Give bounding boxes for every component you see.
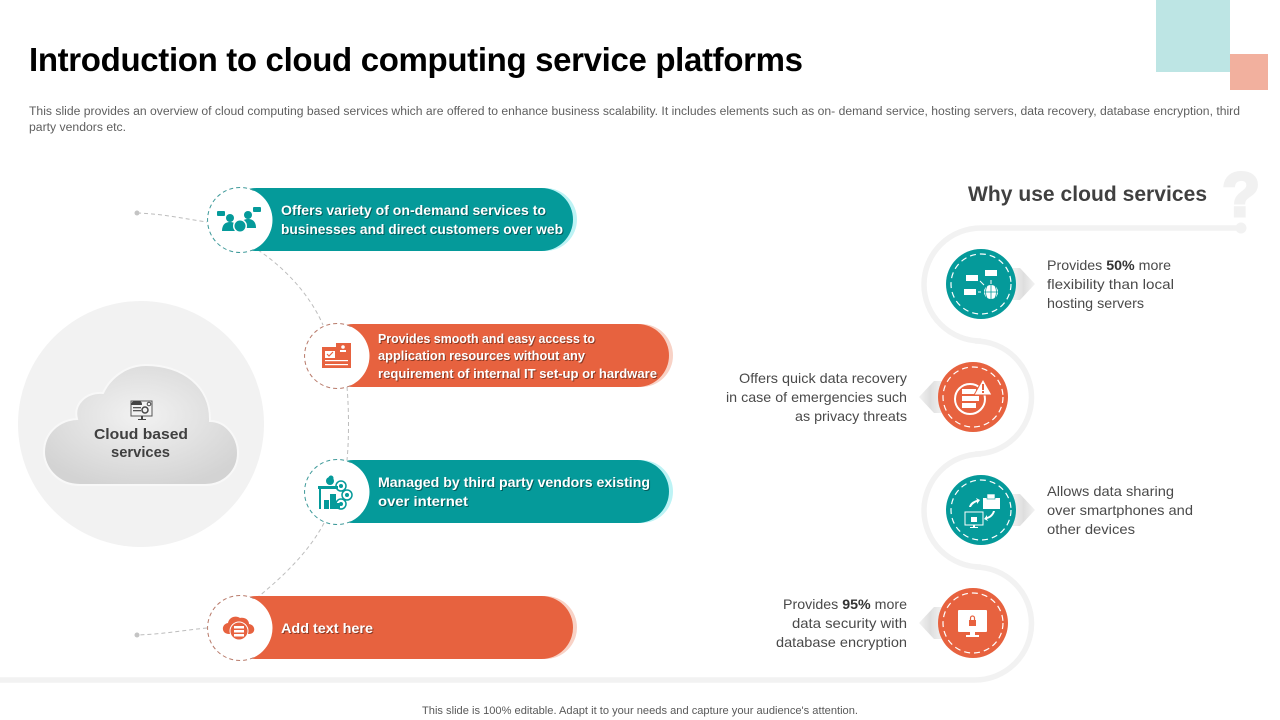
connector end dot: bottom <box>134 632 140 638</box>
dashed connector curve <box>137 213 348 635</box>
item 2 text: Offers quick data recovery <box>739 370 907 386</box>
pill 3 text: over internet <box>378 493 468 509</box>
icon: cloud with server <box>223 617 254 640</box>
pill 1: on-demand services <box>208 187 577 253</box>
icon: server with warning <box>955 379 992 414</box>
description text <box>29 106 1240 134</box>
description text: party vendors etc. <box>29 122 126 134</box>
footer note: This slide is 100% editable. Adapt it to your needs and capture your audience's attention. <box>422 705 858 717</box>
pill 2 text: application resources without any <box>378 348 586 363</box>
item 2 text: in case of emergencies such <box>726 389 907 405</box>
item 2 text: as privacy threats <box>795 408 907 424</box>
pill 3 text <box>378 474 650 509</box>
icon: monitor with lock <box>958 610 987 637</box>
title: Introduction to cloud computing service platforms <box>29 41 803 78</box>
decorative corner square: salmon <box>1230 54 1268 90</box>
pill 2 text: Provides smooth and easy access to <box>378 331 595 346</box>
cloud shape <box>44 365 238 485</box>
pill 1 text: businesses and direct customers over web <box>281 221 563 237</box>
cloud label: services <box>111 444 170 461</box>
pill 3: third party vendors <box>304 460 673 524</box>
snake end dot <box>1236 222 1246 234</box>
item 3 text <box>1047 483 1193 537</box>
icon: servers and globe <box>964 270 998 299</box>
pill 3 text: Managed by third party vendors existing <box>378 474 650 490</box>
item 3 text: Allows data sharing <box>1047 483 1174 499</box>
pill 2 text <box>378 331 657 381</box>
panel: cloud based services hub <box>18 301 264 547</box>
item 3: data sharing <box>946 475 1193 545</box>
icon: building with vendors <box>318 476 352 509</box>
item 2 text <box>726 370 907 424</box>
item 4 text: data security with <box>792 615 907 631</box>
pill 1 text: Offers variety of on-demand services to <box>281 202 546 218</box>
item 4: data security <box>776 588 1008 658</box>
pill 2 text: requirement of internal IT set-up or hardware <box>378 366 657 381</box>
icon: application form <box>322 343 351 368</box>
decorative corner square: teal <box>1156 0 1230 72</box>
item 1 text: flexibility than local <box>1047 276 1174 292</box>
item 2: data recovery <box>726 362 1008 432</box>
description text: This slide provides an overview of cloud computing based services which are offered to enhance business scalability. It includes elements such as on- demand service, hosting servers, data recovery, database encryption, third <box>29 106 1240 118</box>
heading: why use cloud services: Why use cloud services <box>968 183 1207 206</box>
item 4 text: Provides 95% more <box>783 596 907 612</box>
item 3 text: over smartphones and <box>1047 502 1193 518</box>
icon: people with globe <box>217 207 261 233</box>
pill 4 text: Add text here <box>281 620 373 636</box>
item 1 text: hosting servers <box>1047 295 1144 311</box>
snake connector path <box>0 228 1241 680</box>
item 1 text <box>1047 257 1174 311</box>
item 1: flexibility <box>946 249 1174 319</box>
cloud label <box>94 426 188 461</box>
item 4 text: database encryption <box>776 634 907 650</box>
icon: monitor with cloud and gears <box>131 401 152 420</box>
cloud label: Cloud based <box>94 426 188 443</box>
item 4 text <box>776 596 907 650</box>
pill 4: add text here <box>208 596 577 661</box>
pill 1 text <box>281 202 563 237</box>
icon: question mark: ? <box>1222 161 1260 230</box>
item 1 text: Provides 50% more <box>1047 257 1171 273</box>
pill 2: easy access <box>304 324 673 388</box>
item 3 text: other devices <box>1047 521 1135 537</box>
connector end dot: top <box>134 210 140 216</box>
icon: folder and locked monitor <box>965 494 1000 528</box>
